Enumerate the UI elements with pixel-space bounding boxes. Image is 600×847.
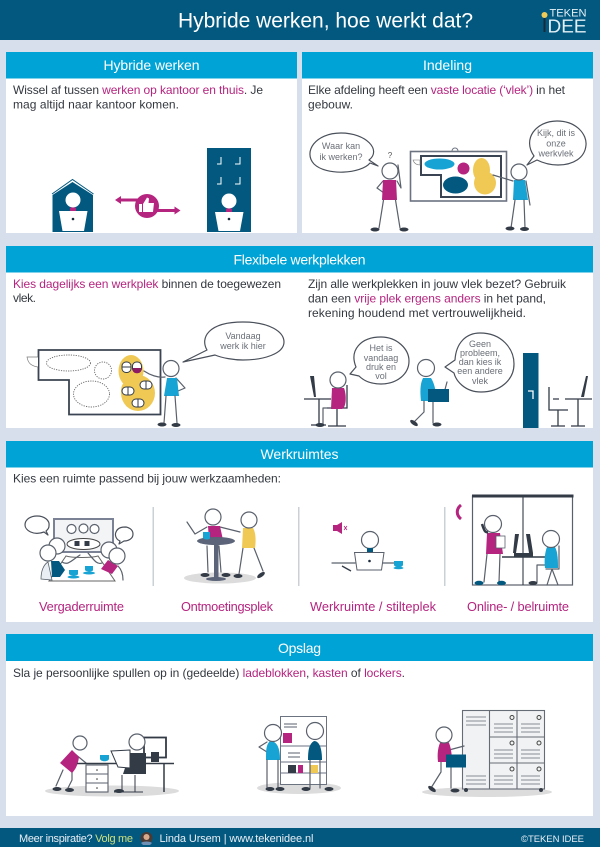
heading: Flexibele werkplekken bbox=[234, 252, 366, 268]
illustratie: online- en belruimte bbox=[457, 494, 574, 585]
lege bureauplek bbox=[549, 376, 592, 426]
speech bubble: vandaag werk ik hier bbox=[183, 322, 284, 362]
icon: thuis bbox=[52, 180, 94, 232]
heading: Hybride werken bbox=[104, 57, 200, 73]
text block rechts: Zijn alle werkplekken in jouw vlek bezet? Gebruik bbox=[308, 277, 567, 291]
text block rechts: rekening houdend met vertrouwelijkheid. bbox=[308, 306, 526, 320]
illustratie: ladeblok bbox=[45, 734, 179, 796]
plattegrond bord bbox=[410, 148, 506, 201]
speech bubble: waar kan ik werken: ik werken? bbox=[319, 152, 363, 162]
label: Online- / belruimte bbox=[467, 599, 569, 614]
panel: indeling bbox=[302, 52, 593, 233]
heading: Opslag bbox=[278, 640, 321, 656]
figure: lopende persoon met koffer bbox=[409, 360, 449, 427]
speech bubble: geen probleem: Geen bbox=[469, 339, 491, 349]
speech bubble: geen probleem: probleem, bbox=[460, 348, 500, 358]
figure: persoon bij plattegrond bbox=[144, 360, 185, 427]
panel: opslag bbox=[6, 634, 593, 816]
icon: deur bbox=[523, 353, 538, 428]
header bar bbox=[0, 0, 600, 40]
speech bubble: geen probleem: vlek bbox=[472, 376, 488, 386]
text block rechts: dan een vrije plek ergens anders in het pand, bbox=[308, 292, 546, 306]
illustratie: kast bbox=[257, 716, 341, 794]
text block: Elke afdeling heeft een vaste locatie (‘vlek’) in het bbox=[308, 83, 566, 97]
speech bubble: kijk dit is onze werkvlek bbox=[527, 121, 586, 165]
label: Ontmoetingsplek bbox=[181, 599, 274, 614]
speech bubble: het is vandaag druk en vol bbox=[350, 337, 409, 384]
logo: DEE bbox=[548, 16, 586, 36]
speech bubble: het is vandaag druk en vol: vandaag bbox=[364, 353, 398, 363]
speech bubble: het is vandaag druk en vol: vol bbox=[375, 371, 387, 381]
text block: Wissel af tussen werken op kantoor en thuis. Je bbox=[13, 83, 263, 97]
illustratie: ontmoetingsplek bbox=[184, 509, 266, 584]
heading: Indeling bbox=[423, 57, 472, 73]
speech bubble: waar kan ik werken: Waar kan bbox=[322, 141, 360, 151]
speech bubble: vandaag werk ik hier: werk ik hier bbox=[219, 341, 266, 351]
illustratie: vergaderruimte bbox=[25, 516, 133, 581]
heading: Werkruimtes bbox=[260, 446, 338, 462]
speech bubble: geen probleem bbox=[445, 333, 514, 392]
icon: kantoor bbox=[207, 148, 251, 232]
label: Vergaderruimte bbox=[39, 599, 124, 614]
speech bubble: geen probleem: dan kies ik bbox=[459, 357, 502, 367]
panel: hybride werken bbox=[6, 52, 297, 233]
text block: Sla je persoonlijke spullen op in (gedeelde) ladeblokken, kasten of lockers. bbox=[13, 666, 405, 680]
plattegrond met vlek bbox=[27, 350, 160, 414]
speech bubble: het is vandaag druk en vol: Het is bbox=[369, 343, 393, 353]
text block bbox=[308, 83, 566, 112]
illustratie: stilteplek bbox=[332, 522, 404, 571]
logo bbox=[542, 8, 587, 36]
text block: Kies een ruimte passend bij jouw werkzaamheden: bbox=[13, 472, 281, 486]
logo: TEKEN bbox=[550, 8, 587, 20]
text block links bbox=[13, 277, 281, 305]
text block bbox=[13, 83, 263, 112]
speech bubble: het is vandaag druk en vol: druk en bbox=[366, 362, 396, 372]
title: Hybride werken, hoe werkt dat? bbox=[178, 10, 473, 32]
copyright: ©TEKEN IDEE bbox=[521, 834, 584, 845]
figure: wijzende persoon bbox=[493, 164, 530, 231]
naam en website: Linda Ursem | www.tekenidee.nl bbox=[160, 833, 314, 845]
text block links: vlek. bbox=[13, 291, 36, 305]
speech bubble: kijk dit is onze werkvlek: onze bbox=[546, 138, 566, 148]
icon: wisselen met duim bbox=[115, 194, 180, 218]
speech bubble: kijk dit is onze werkvlek: werkvlek bbox=[537, 148, 574, 158]
footer bbox=[0, 828, 600, 847]
figure: vragende persoon: ? bbox=[388, 151, 393, 160]
panel: werkruimtes bbox=[6, 441, 593, 622]
text block: mag altijd naar kantoor komen. bbox=[13, 98, 179, 112]
figure: persoon aan bureau bbox=[304, 372, 347, 427]
speech bubble: vandaag werk ik hier: Vandaag bbox=[225, 331, 261, 341]
illustratie: lockers bbox=[422, 710, 552, 797]
label: Werkruimte / stilteplek bbox=[310, 599, 437, 614]
avatar bbox=[140, 832, 152, 845]
speech bubble: geen probleem: een andere bbox=[457, 366, 503, 376]
speech bubble: waar kan ik werken bbox=[310, 133, 378, 172]
text block rechts bbox=[308, 277, 567, 320]
panel: flexibele werkplekken bbox=[6, 246, 593, 428]
speech bubble: kijk dit is onze werkvlek: Kijk, dit is bbox=[537, 128, 576, 138]
text block: gebouw. bbox=[308, 98, 353, 112]
inspiratie tekst: Meer inspiratie? Volg me bbox=[19, 833, 133, 845]
text block links: Kies dagelijks een werkplek binnen de toegewezen bbox=[13, 277, 281, 291]
figure: vragende persoon bbox=[370, 151, 408, 232]
